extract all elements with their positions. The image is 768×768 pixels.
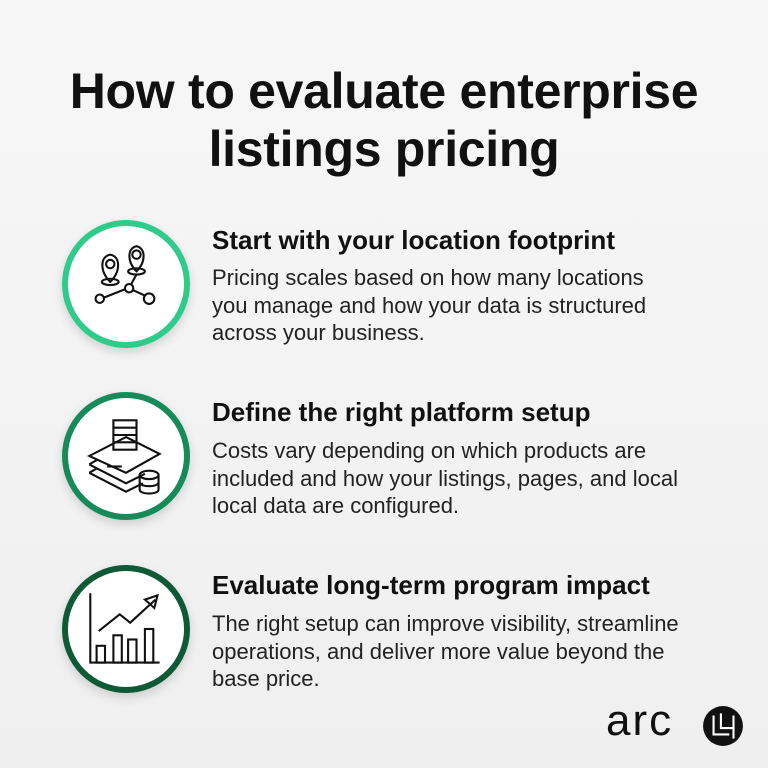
text 2 (212, 438, 678, 518)
logo: arc (606, 696, 743, 746)
text 3 (212, 611, 679, 691)
text 2: Costs vary depending on which products are (212, 438, 646, 463)
text 2: included and how your listings, pages, and local (212, 466, 678, 490)
text 1: you manage and how your data is structured (212, 292, 646, 318)
text 1: across your business. (212, 320, 425, 345)
heading 1: Start with your location footprint (212, 225, 615, 255)
title: listings pricing (209, 121, 559, 177)
icon: location footprint (62, 220, 190, 348)
heading 2: Define the right platform setup (212, 397, 590, 427)
logo: arc: arc (606, 696, 673, 745)
icon: platform setup (62, 392, 190, 520)
heading 3: Evaluate long-term program impact (212, 570, 650, 600)
text 1: Pricing scales based on how many locations (212, 265, 644, 290)
text 3: The right setup can improve visibility, streamline (212, 611, 679, 636)
icon: growth chart (62, 565, 190, 693)
title (70, 63, 698, 177)
title: How to evaluate enterprise (70, 63, 698, 119)
text 1 (212, 265, 646, 345)
text 3: base price. (212, 666, 320, 691)
text 2: local data are configured. (212, 493, 459, 518)
text 3: operations, and deliver more value beyond the (212, 638, 665, 664)
